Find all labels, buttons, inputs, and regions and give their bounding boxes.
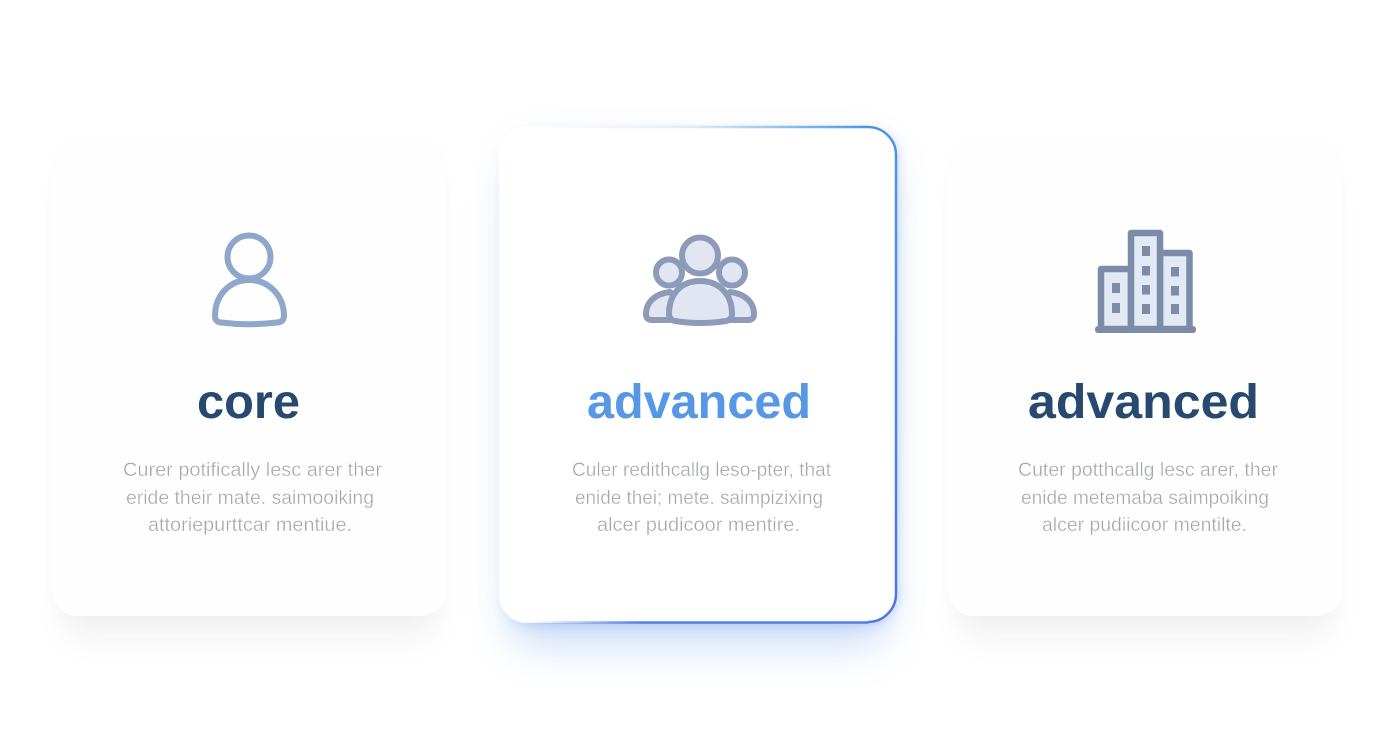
text block: advanced description: alcer pudicoor mentire. xyxy=(597,515,800,536)
text block: core description: attoriepurttcar mentiue. xyxy=(148,515,352,536)
text block: advanced description: Culer redithcallg leso-pter, that xyxy=(572,460,832,481)
text block: core description xyxy=(123,460,383,536)
panel: advanced card highlighted xyxy=(499,126,897,623)
text block: advanced description xyxy=(1018,460,1279,536)
card edge highlights xyxy=(530,127,896,622)
icon: office buildings xyxy=(1095,233,1196,333)
panel: core card xyxy=(52,135,446,616)
heading: core: core xyxy=(197,376,300,429)
text block: advanced description: enide metemaba saimpoiking xyxy=(1021,488,1269,509)
text block: core description: eride their mate. saimooiking xyxy=(126,488,374,509)
text block: advanced description: Cuter potthcallg lesc arer, ther xyxy=(1018,460,1279,481)
heading: advanced: advanced xyxy=(587,376,811,429)
text block: advanced description: alcer pudiicoor mentilte. xyxy=(1042,515,1247,536)
text block: advanced description xyxy=(572,460,832,536)
icon: single person xyxy=(215,236,284,324)
icon: group of people xyxy=(646,238,754,323)
panel: advanced card right xyxy=(948,135,1342,616)
text block: advanced description: enide thei; mete. saimpizixing xyxy=(575,488,823,509)
text block: core description: Curer potifically lesc arer ther xyxy=(123,460,383,481)
heading: advanced: advanced xyxy=(1028,376,1259,429)
